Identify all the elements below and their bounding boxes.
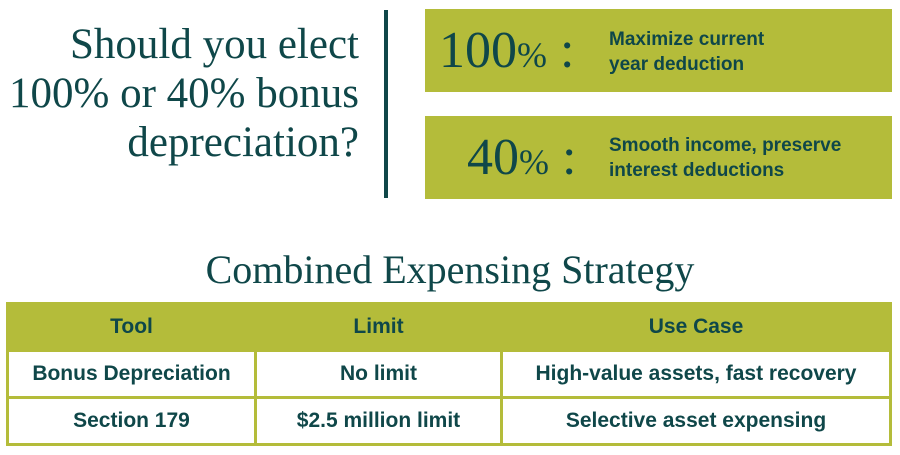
table: Bonus Depreciation: [32, 362, 231, 385]
panel: 100%: 100% :: [439, 22, 574, 79]
table: [6, 302, 892, 446]
divider line: [384, 10, 388, 198]
heading: question: depreciation?: [127, 119, 359, 166]
panel: 40%: [425, 116, 892, 199]
panel: 40%: interest deductions: [609, 160, 784, 181]
heading: question: Should you elect: [70, 21, 359, 68]
table: Selective asset expensing: [566, 409, 826, 432]
table: No limit: [340, 362, 417, 385]
panel: 40%: Smooth income, preserve: [609, 135, 841, 156]
panel: 100%: [425, 9, 892, 92]
table: Limit: [353, 315, 404, 338]
title: combined strategy: Combined Expensing Strategy: [206, 247, 694, 292]
heading: question: 100% or 40% bonus: [9, 70, 359, 117]
table: High-value assets, fast recovery: [536, 362, 856, 385]
panel: 100%: Maximize current: [609, 29, 764, 50]
panel: 100%: year deduction: [609, 54, 744, 75]
heading: question: [9, 21, 359, 166]
table: Use Case: [649, 315, 743, 338]
table: Tool: [110, 315, 153, 338]
panel: 40%: 40% :: [467, 129, 576, 186]
table: $2.5 million limit: [297, 409, 460, 432]
table: Section 179: [73, 409, 190, 432]
